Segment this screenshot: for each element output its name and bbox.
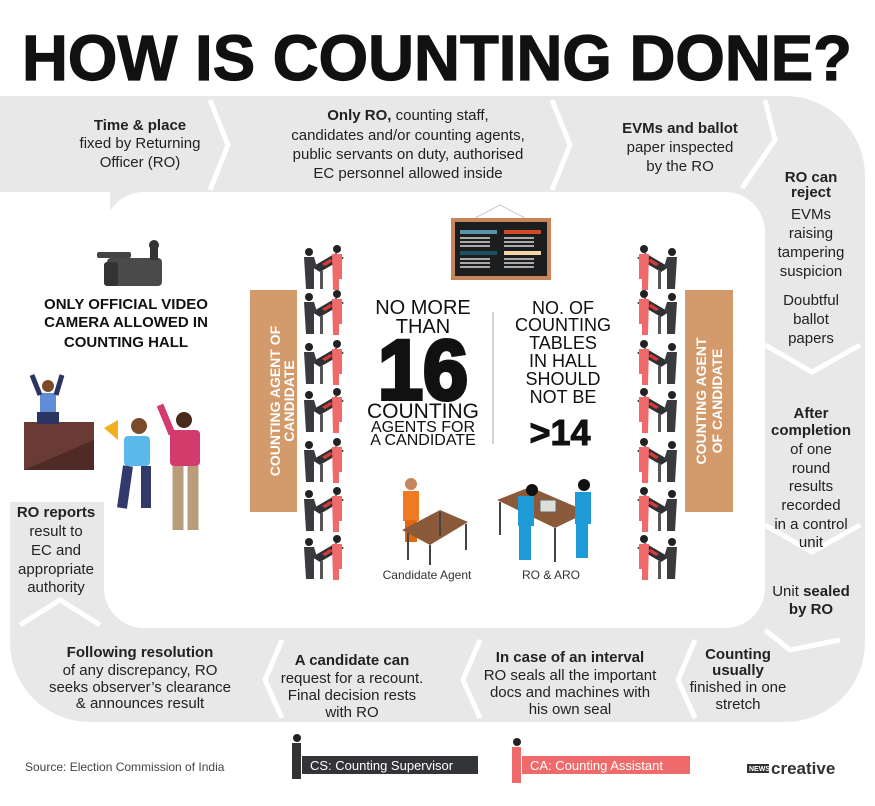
text: step 9 recount: [281, 652, 423, 721]
text: only official video camera: CAMERA ALLOWED IN: [44, 314, 208, 331]
illustration: crowd: [24, 375, 200, 530]
text: step 9 recount: request for a recount.: [281, 670, 423, 687]
legend: counting assistant: [512, 738, 690, 783]
text: step 5 after completion: in a control: [774, 516, 848, 533]
text: no more than 16: [367, 297, 479, 449]
legend: counting supervisor: [292, 734, 478, 779]
text: step 6 unit sealed: Unit sealed: [772, 583, 850, 600]
text: step 4 RO can reject: ballot: [793, 311, 830, 328]
text: step 1 time and place: [80, 117, 200, 171]
text: step 6 unit sealed: [772, 583, 850, 618]
text: step 2 who allowed: [291, 107, 525, 182]
text: step 4 RO can reject: RO can: [785, 169, 837, 186]
text: step 2 who allowed: candidates and/or counting agents,: [291, 127, 525, 144]
text: step 5 after completion: [771, 405, 851, 551]
text: only official video camera: ONLY OFFICIAL VIDEO: [44, 296, 208, 313]
text: step 7 counting usually: Counting: [705, 646, 771, 663]
text: only official video camera: [44, 296, 208, 351]
text: step 10 following resolution: of any discrepancy, RO: [63, 662, 217, 679]
text: step 5 after completion: results: [789, 478, 833, 495]
text: step 9 recount: Final decision rests: [288, 687, 416, 704]
text: step 1 time and place: Officer (RO): [100, 154, 180, 171]
panel: counting agent of candidate left: [250, 290, 297, 512]
text: step 4 RO can reject: papers: [788, 330, 834, 347]
text: step 7 counting usually: [690, 646, 786, 713]
text: step 9 recount: A candidate can: [295, 652, 409, 669]
text: no of counting tables >14: IN HALL: [529, 351, 597, 371]
text: step 7 counting usually: finished in one: [690, 679, 786, 696]
text: step 4 RO can reject: reject: [791, 184, 831, 201]
text: step 5 after completion: round: [792, 460, 830, 477]
text: step 4 RO can reject: raising: [789, 225, 833, 242]
legend: counting assistant: CA: Counting Assistant: [530, 758, 663, 773]
text: step 10 following resolution: [49, 644, 231, 712]
text: step 8 interval: his own seal: [529, 701, 611, 718]
text: step 7 counting usually: stretch: [715, 696, 761, 713]
illustration: RO & ARO: RO & ARO: [522, 568, 580, 582]
text: step 5 after completion: After: [793, 405, 829, 422]
text: step 2 who allowed: public servants on duty, authorised: [293, 146, 523, 163]
text: source: Source: Election Commission of India: [25, 760, 225, 774]
illustration: candidate agent: [383, 478, 472, 582]
text: step 11 RO reports: EC and: [31, 542, 81, 559]
illustration: candidate agent: Candidate Agent: [383, 568, 472, 582]
text: step 10 following resolution: seeks observer’s clearance: [49, 679, 231, 696]
text: step 4 RO can reject: EVMs: [791, 206, 831, 223]
text: no more than 16: THAN: [396, 316, 450, 338]
icon: video camera: [97, 240, 162, 286]
text: no more than 16: 16: [378, 323, 468, 417]
text: step 5 after completion: unit: [799, 534, 824, 551]
text: step 2 who allowed: EC personnel allowed inside: [313, 165, 503, 182]
text: step 4 RO can reject: tampering: [778, 244, 844, 261]
text: only official video camera: COUNTING HALL: [64, 334, 188, 351]
divider line: [492, 312, 494, 444]
text: step 4 RO can reject: Doubtful: [783, 292, 839, 309]
text: no more than 16: A CANDIDATE: [370, 432, 476, 449]
logo: news18 creative: creative: [771, 759, 835, 778]
panel: counting agent of candidate right: OF CANDIDATE: [709, 349, 725, 453]
text: step 8 interval: docs and machines with: [490, 684, 650, 701]
text: step 3 EVMs inspected: by the RO: [646, 158, 714, 175]
text: step 10 following resolution: Following resolution: [67, 644, 213, 661]
text: step 11 RO reports: RO reports: [17, 504, 95, 521]
panel: counting agent of candidate left: COUNTING AGENT OF: [267, 325, 283, 476]
text: step 3 EVMs inspected: paper inspected: [627, 139, 733, 156]
text: step 8 interval: RO seals all the important: [484, 667, 657, 684]
text: no of counting tables >14: COUNTING: [515, 315, 611, 335]
panel: gray process band: [0, 96, 865, 722]
text: no of counting tables >14: TABLES: [529, 333, 597, 353]
text: step 11 RO reports: appropriate: [18, 561, 94, 578]
text: no of counting tables >14: >14: [529, 412, 591, 453]
text: step 2 who allowed: Only RO, counting staff,: [327, 107, 489, 124]
text: step 11 RO reports: result to: [29, 523, 83, 540]
text: no of counting tables >14: NOT BE: [530, 387, 596, 407]
text: step 8 interval: [484, 649, 657, 718]
text: no of counting tables >14: SHOULD: [525, 369, 601, 389]
illustration: RO & ARO: [497, 479, 591, 582]
text: step 3 EVMs inspected: EVMs and ballot: [622, 120, 738, 137]
text: no more than 16: AGENTS FOR: [371, 419, 475, 436]
panel: counting agent of candidate right: [685, 290, 733, 512]
text: step 7 counting usually: usually: [712, 662, 765, 679]
text: step 9 recount: with RO: [324, 704, 379, 721]
icons: left column of counting tables: [304, 245, 344, 580]
panel: counting agent of candidate right: COUNTING AGENT: [693, 337, 709, 465]
text: step 4 RO can reject: suspicion: [780, 263, 842, 280]
icons: right column of counting tables: [637, 245, 677, 580]
text: step 3 EVMs inspected: [622, 120, 738, 175]
text: no of counting tables >14: NO. OF: [532, 298, 594, 318]
text: no of counting tables >14: [515, 298, 611, 453]
text: step 5 after completion: completion: [771, 422, 851, 439]
text: no more than 16: NO MORE: [375, 297, 471, 319]
legend: counting supervisor: CS: Counting Supervisor: [310, 758, 454, 773]
text: step 1 time and place: Time & place: [94, 117, 186, 134]
text: step 10 following resolution: & announces result: [76, 695, 205, 712]
text: step 5 after completion: of one: [790, 441, 832, 458]
panel: counting agent of candidate left: CANDIDATE: [281, 360, 297, 442]
text: step 1 time and place: fixed by Returning: [80, 135, 200, 152]
text: step 4 RO can reject: [778, 169, 844, 347]
text: step 6 unit sealed: by RO: [789, 601, 833, 618]
logo: news18 creative: NEWS: [749, 766, 770, 773]
icon: blackboard: [451, 205, 551, 280]
text: step 11 RO reports: [17, 504, 95, 596]
title: HOW IS COUNTING DONE?: [22, 22, 852, 94]
text: step 5 after completion: recorded: [781, 497, 841, 514]
text: no more than 16: COUNTING: [367, 400, 479, 423]
text: step 11 RO reports: authority: [27, 579, 85, 596]
text: step 8 interval: In case of an interval: [496, 649, 644, 666]
